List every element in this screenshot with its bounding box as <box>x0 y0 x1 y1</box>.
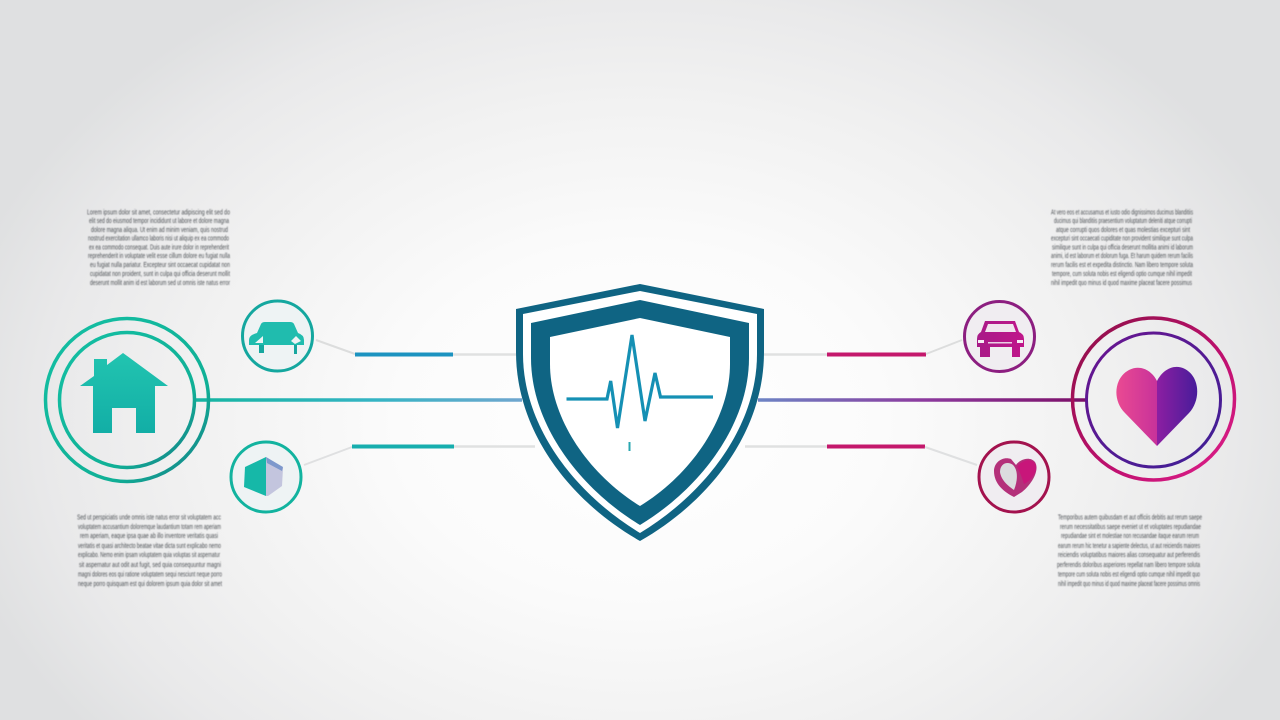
small circle: teal car <box>242 301 312 371</box>
text block: bottom left: explicabo. Nemo enim ipsam voluptatem quia voluptas sit aspernatur <box>78 550 220 559</box>
text block: top right: animi, id est laborum et dolorum fuga. Et harum quidem rerum facilis <box>1051 251 1193 260</box>
shield white gap <box>523 291 757 533</box>
text block: bottom left: veritatis et quasi architecto beatae vitae dicta sunt explicabo nemo <box>78 541 221 550</box>
ring <box>231 442 301 512</box>
ring <box>979 442 1049 512</box>
connector lines: right lower <box>745 446 977 465</box>
inner ring <box>1086 333 1220 467</box>
text block: bottom left: rem aperiam, eaque ipsa quae ab illo inventore veritatis quasi <box>80 531 218 540</box>
text block: top right: At vero eos et accusamus et iusto odio dignissimos ducimus blanditiis <box>1051 208 1193 216</box>
text block: top left: Lorem ipsum dolor sit amet, consectetur adipiscing elit sed do <box>87 208 230 216</box>
shield white centre <box>550 318 730 506</box>
text block: bottom right <box>1057 512 1202 588</box>
ring <box>964 302 1034 372</box>
text block: bottom left: voluptatem accusantium doloremque laudantium totam rem aperiam <box>78 522 221 531</box>
text block: top left: eu fugiat nulla pariatur. Excepteur sint occaecat cupidatat non <box>90 260 230 269</box>
left large circle: home <box>46 318 208 482</box>
central shield <box>516 284 764 541</box>
text block: top left: ex ea commodo consequat. Duis aute irure dolor in reprehenderit <box>89 242 230 252</box>
icon: heart with hands <box>994 458 1037 497</box>
heartbeat line <box>566 335 713 428</box>
icon: front car <box>977 321 1024 357</box>
text block: top left: nostrud exercitation ullamco laboris nisi ut aliquip ex ea commodo <box>88 234 229 242</box>
connector lines: left upper <box>316 340 520 354</box>
text block: bottom left: sit aspernatur aut odit aut fugit, sed quia consequuntur magni <box>79 560 221 569</box>
icon: two-tone shield <box>244 457 283 496</box>
text block: top right: excepturi sint occaecati cupiditate non provident similique sunt culpa <box>1051 234 1193 242</box>
text block: top right: nihil impedit quo minus id quod maxime placeat facere possimus <box>1051 278 1192 287</box>
icon: car <box>249 322 304 354</box>
text block: top right: rerum facilis est et expedita distinctio. Nam libero tempore soluta <box>1051 260 1193 269</box>
text block: top right: tempore, cum soluta nobis est eligendi optio cumque nihil impedit <box>1052 269 1193 278</box>
text block: top right: similique sunt in culpa qui officia deserunt mollitia animi id laborum <box>1052 242 1193 252</box>
main line: left <box>196 398 522 402</box>
text block: top right <box>1051 208 1193 287</box>
text block: top left <box>87 208 231 287</box>
small circle: magenta car <box>964 302 1034 372</box>
outer and inner rings <box>46 318 208 482</box>
text block: top left: elit sed do eiusmod tempor incididunt ut labore et dolore magna <box>89 216 230 225</box>
text block: bottom right: perferendis doloribus asperiores repellat nam libero tempore soluta <box>1057 560 1200 569</box>
small circle: magenta care heart <box>979 442 1049 512</box>
text block: bottom left: neque porro quisquam est qui dolorem ipsum quia dolor sit amet <box>78 579 223 588</box>
text block: bottom right: reiciendis voluptatibus maiores alias consequatur aut perferendis <box>1058 550 1200 559</box>
text block: top left: reprehenderit in voluptate velit esse cillum dolore eu fugiat nulla <box>88 251 231 260</box>
text block: bottom left: magni dolores eos qui ratione voluptatem sequi nesciunt neque porro <box>78 570 222 578</box>
text block: top left: deserunt mollit anim id est laborum sed ut omnis iste natus error <box>90 278 230 287</box>
right large circle: heart <box>1072 318 1234 480</box>
text block: top right: ducimus qui blanditiis praesentium voluptatum deleniti atque corrupti <box>1054 216 1192 225</box>
text block: top right: atque corrupti quos dolores et quas molestias excepturi sint <box>1056 225 1191 234</box>
text block: top left: dolore magna aliqua. Ut enim ad minim veniam, quis nostrud <box>91 225 228 234</box>
text block: top left: cupidatat non proident, sunt in culpa qui officia deserunt mollit <box>90 269 231 278</box>
text block: bottom left: Sed ut perspiciatis unde omnis iste natus error sit voluptatem acc <box>77 512 221 522</box>
text block: bottom left <box>77 512 223 588</box>
small circle: teal shield <box>231 442 301 512</box>
main line: right <box>758 398 1087 402</box>
outer ring <box>1072 318 1234 480</box>
icon: house <box>80 353 168 433</box>
shield inner band <box>531 300 749 525</box>
icon: two-tone heart <box>1116 367 1197 446</box>
connector lines: left lower <box>304 446 535 465</box>
text block: bottom right: rerum necessitatibus saepe eveniet ut et voluptates repudiandae <box>1060 522 1201 531</box>
text block: bottom right: Temporibus autem quibusdam et aut officiis debitis aut rerum saepe <box>1058 512 1202 522</box>
text block: bottom right: repudiandae sint et molestiae non recusandae itaque earum rerum <box>1061 531 1199 540</box>
shield outer band <box>516 284 764 541</box>
small tick <box>628 442 630 451</box>
ring <box>242 301 312 371</box>
connector lines: right upper <box>760 340 962 354</box>
